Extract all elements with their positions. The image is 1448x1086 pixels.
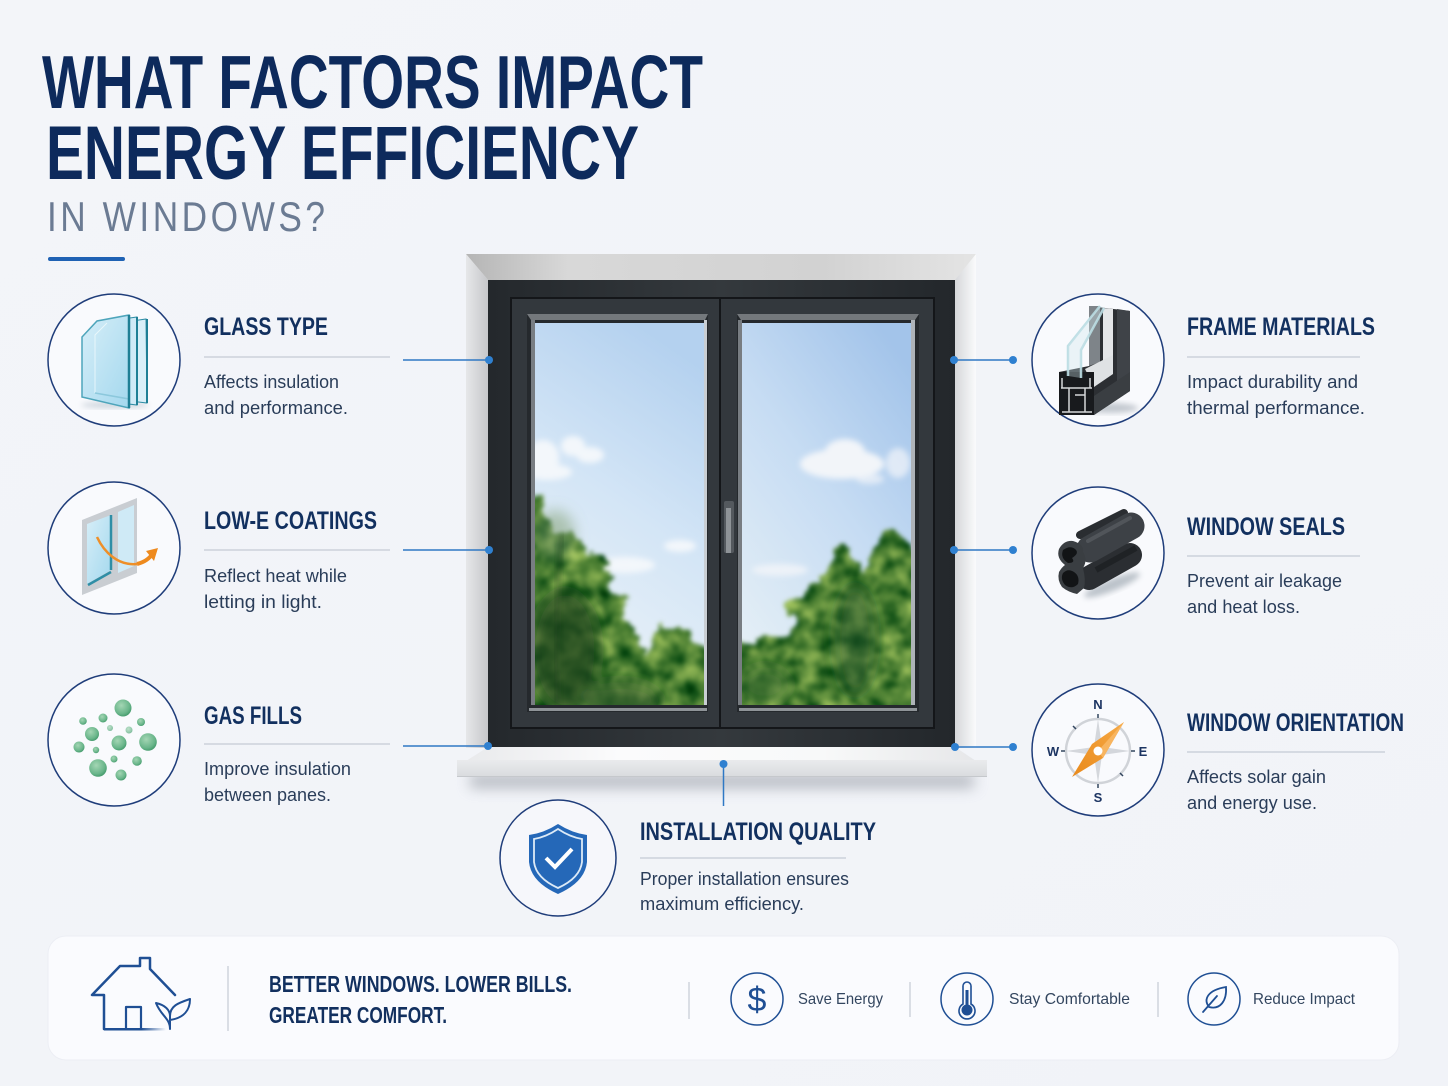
text: window orientation: Affects solar gain (1187, 766, 1326, 787)
heading: glass type: GLASS TYPE (204, 313, 328, 341)
icon: shield with check (500, 800, 616, 916)
panel: glass type (48, 294, 390, 426)
icon: compass: N (1093, 697, 1103, 712)
text: window orientation: and energy use. (1187, 792, 1317, 813)
text: window seals: and heat loss. (1187, 596, 1300, 617)
text: low-e coatings: letting in light. (204, 591, 322, 612)
icon: compass: S (1094, 790, 1103, 805)
text: glass type: and performance. (204, 397, 348, 418)
text: installation quality: Proper installation ensures (640, 868, 849, 889)
heading: window seals: WINDOW SEALS (1187, 513, 1345, 541)
banner tagline: BETTER WINDOWS. LOWER BILLS. (269, 971, 572, 997)
connector: gas fills (403, 742, 492, 750)
left sash (512, 299, 719, 727)
heading: low-e coatings: LOW-E COATINGS (204, 507, 377, 535)
icon: coated window with heat arrow (48, 482, 180, 614)
text: glass type: Affects insulation (204, 371, 339, 392)
text: installation quality: maximum efficiency. (640, 893, 804, 914)
title (42, 40, 703, 196)
connector: low-e coatings (403, 546, 493, 554)
panel: gas fills (48, 674, 390, 806)
icon: glass panes (48, 294, 180, 426)
wall reveal (466, 254, 976, 748)
text: frame materials: thermal performance. (1187, 397, 1365, 418)
connector: window orientation (951, 743, 1017, 751)
heading: gas fills: GAS FILLS (204, 702, 302, 730)
connector: glass type (403, 356, 493, 364)
icon: gas bubbles (48, 674, 180, 806)
subtitle: IN WINDOWS? (47, 194, 325, 241)
text: gas fills: between panes. (204, 784, 331, 805)
text: low-e coatings: Reflect heat while (204, 565, 347, 586)
text: gas fills: Improve insulation (204, 758, 351, 779)
panel: window orientation (1032, 684, 1404, 816)
connector: installation quality (720, 760, 728, 806)
connector: frame materials (950, 356, 1017, 364)
title: WHAT FACTORS IMPACT (42, 40, 703, 124)
item: reduce impact: Reduce Impact (1253, 991, 1356, 1008)
panel: low-e coatings (48, 482, 390, 614)
right glass view (742, 323, 911, 705)
window illustration (457, 254, 987, 788)
right sash (721, 299, 933, 727)
window handle (724, 501, 734, 553)
icon: rubber seal profile (1032, 487, 1164, 619)
heading: frame materials: FRAME MATERIALS (1187, 313, 1375, 341)
text: window seals: Prevent air leakage (1187, 570, 1342, 591)
sill shadow (470, 774, 974, 788)
banner tagline: GREATER COMFORT. (269, 1002, 447, 1028)
connector: window seals (950, 546, 1017, 554)
item: save energy (731, 973, 883, 1025)
window sill (457, 747, 987, 777)
item: stay comfortable: Stay Comfortable (1009, 991, 1130, 1008)
panel: bottom banner (48, 936, 1399, 1060)
icon: house with leaf (92, 958, 190, 1030)
item: stay comfortable (941, 973, 1130, 1025)
icon: compass (1032, 684, 1164, 816)
title accent rule (48, 257, 125, 261)
item: reduce impact (1188, 973, 1356, 1025)
icon: compass: E (1139, 744, 1148, 759)
item: save energy: Save Energy (798, 991, 883, 1008)
text: frame materials: Impact durability and (1187, 371, 1358, 392)
heading: installation quality: INSTALLATION QUALITY (640, 818, 876, 846)
panel: window seals (1032, 487, 1360, 619)
item: save energy: $ (748, 981, 767, 1019)
panel: frame materials (1032, 294, 1375, 426)
icon: frame cross-section (1032, 294, 1164, 426)
left glass view (535, 323, 704, 705)
title: ENERGY EFFICIENCY (46, 111, 639, 196)
icon: compass: W (1047, 744, 1060, 759)
panel: installation quality (500, 800, 876, 916)
outer frame (488, 280, 955, 747)
